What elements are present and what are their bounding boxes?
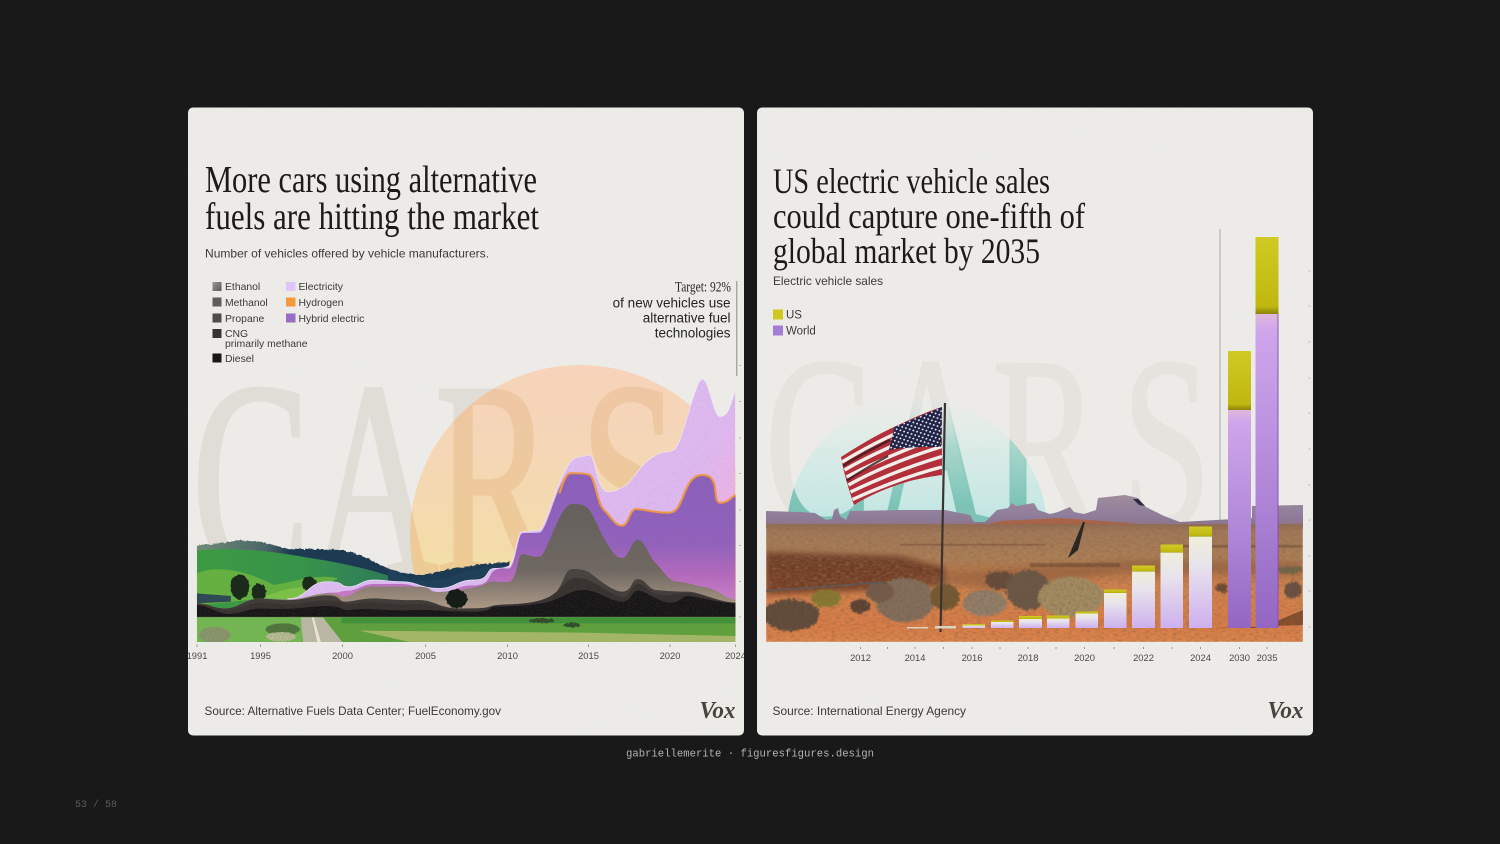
2030 bar	[1228, 351, 1251, 628]
title	[773, 161, 1085, 271]
caption: gabriellemerite · figuresfigures.design	[626, 748, 874, 760]
distant road	[1068, 522, 1085, 558]
x axis labels: 2022	[1133, 652, 1154, 663]
flagpole	[940, 403, 945, 632]
source: Source: International Energy Agency	[772, 704, 966, 718]
ethanol layer	[215, 504, 736, 608]
x axis labels: 2024	[725, 650, 746, 661]
electricity layer	[288, 379, 735, 617]
large word CARS: C	[765, 306, 872, 578]
card background	[757, 108, 1313, 736]
large word CARS: A	[874, 306, 990, 578]
CARS letters tinted over the sun: S	[1122, 306, 1211, 578]
CARS letters tinted over the sun	[410, 386, 663, 575]
legend: Ethanol	[225, 282, 260, 293]
diesel layer	[197, 590, 735, 617]
hills landscape	[196, 540, 510, 614]
dark scrub band	[766, 552, 945, 595]
x axis labels: 1991	[187, 650, 207, 661]
target callout: of new vehicles use	[613, 296, 730, 310]
CARS letters tinted over the sun: R	[992, 306, 1099, 578]
Vox logo: Vox	[1268, 698, 1304, 724]
target callout	[613, 280, 737, 376]
US portions of small bars	[962, 526, 1212, 626]
legend: US	[786, 310, 802, 322]
reference line	[1220, 229, 1221, 520]
x axis labels: 2020	[660, 650, 680, 661]
x axis labels: 2014	[905, 652, 925, 663]
subtitle: Number of vehicles offered by vehicle manufacturers.	[205, 246, 489, 260]
bottom shadow	[1213, 610, 1303, 628]
card background	[188, 108, 744, 736]
page number: 53 / 58	[75, 799, 117, 811]
bushes	[763, 566, 1303, 631]
chart layers	[197, 379, 735, 617]
legend: Diesel	[225, 354, 254, 365]
CARS letters tinted over the sun: R	[435, 324, 553, 635]
bar chart	[907, 237, 1278, 628]
x axis labels: 2016	[962, 652, 982, 663]
x axis labels: 2015	[578, 650, 599, 661]
CARS letters tinted over the sun: C	[192, 324, 310, 635]
mesas	[766, 495, 1303, 528]
legend: Electricity	[298, 282, 344, 293]
legend	[773, 310, 816, 338]
right card	[757, 108, 1313, 736]
large word CARS: A	[311, 324, 439, 635]
orange sun circle	[410, 365, 736, 604]
Vox logo: Vox	[700, 698, 736, 724]
2035 bar	[1256, 237, 1278, 628]
trees	[230, 574, 317, 600]
methanol and propane layer	[197, 569, 735, 617]
title	[205, 159, 539, 238]
left card	[187, 108, 750, 736]
title: could capture one-fifth of	[773, 196, 1085, 236]
x axis labels: 2030	[1229, 652, 1250, 663]
legend: World	[786, 326, 816, 338]
target callout: technologies	[655, 326, 731, 340]
source: Source: Alternative Fuels Data Center; FuelEconomy.gov	[204, 704, 501, 718]
area chart over landscape	[197, 379, 735, 643]
CARS letters tinted over the sun: S	[580, 324, 679, 635]
small bars	[907, 536, 1212, 628]
lone tree	[446, 589, 467, 608]
CARS letters tinted over the sun	[788, 405, 1026, 522]
legend: Propane	[225, 314, 265, 325]
x axis labels: 2012	[850, 652, 871, 663]
horizontal scrub streaks	[900, 544, 1303, 567]
CARS letters tinted over the sun: A	[874, 306, 990, 578]
x axis labels: 2035	[1257, 652, 1277, 663]
x axis labels: 2010	[497, 650, 518, 661]
large word CARS: C	[192, 324, 310, 635]
hydrogen and hybrid electric layer	[324, 474, 736, 600]
title: More cars using alternative	[205, 159, 537, 201]
legend: Hydrogen	[298, 298, 344, 309]
x axis labels: 2018	[1018, 652, 1038, 663]
legend: Methanol	[225, 298, 268, 309]
legend: Hybrid electric	[298, 314, 364, 325]
title: fuels are hitting the market	[205, 196, 539, 238]
large word CARS: R	[992, 306, 1099, 578]
legend	[212, 282, 364, 365]
CARS letters tinted over the sun: C	[765, 306, 872, 578]
American flag	[835, 400, 950, 510]
fence	[766, 582, 885, 591]
target callout: Target: 92%	[675, 280, 731, 296]
x axis labels: 2024	[1190, 652, 1211, 663]
x axis labels: 1995	[250, 650, 271, 661]
desert photo	[763, 495, 1303, 642]
target callout: alternative fuel	[643, 310, 730, 326]
legend: CNG	[225, 329, 248, 340]
x axis labels: 2000	[332, 650, 353, 661]
ground	[766, 524, 1303, 642]
legend: primarily methane	[225, 339, 308, 350]
x axis labels: 2020	[1074, 652, 1095, 663]
title: global market by 2035	[773, 231, 1040, 271]
x axis labels: 2005	[415, 650, 436, 661]
large word CARS: S	[580, 324, 679, 635]
large word CARS: R	[435, 324, 553, 635]
subtitle: Electric vehicle sales	[773, 274, 883, 288]
large word CARS: S	[1122, 306, 1211, 578]
CARS letters tinted over the sun: A	[311, 324, 439, 635]
x axis labels	[187, 366, 746, 661]
x axis labels	[850, 271, 1310, 663]
teal sun circle	[794, 427, 1046, 518]
title: US electric vehicle sales	[773, 161, 1050, 201]
bottom field with road	[197, 616, 735, 643]
